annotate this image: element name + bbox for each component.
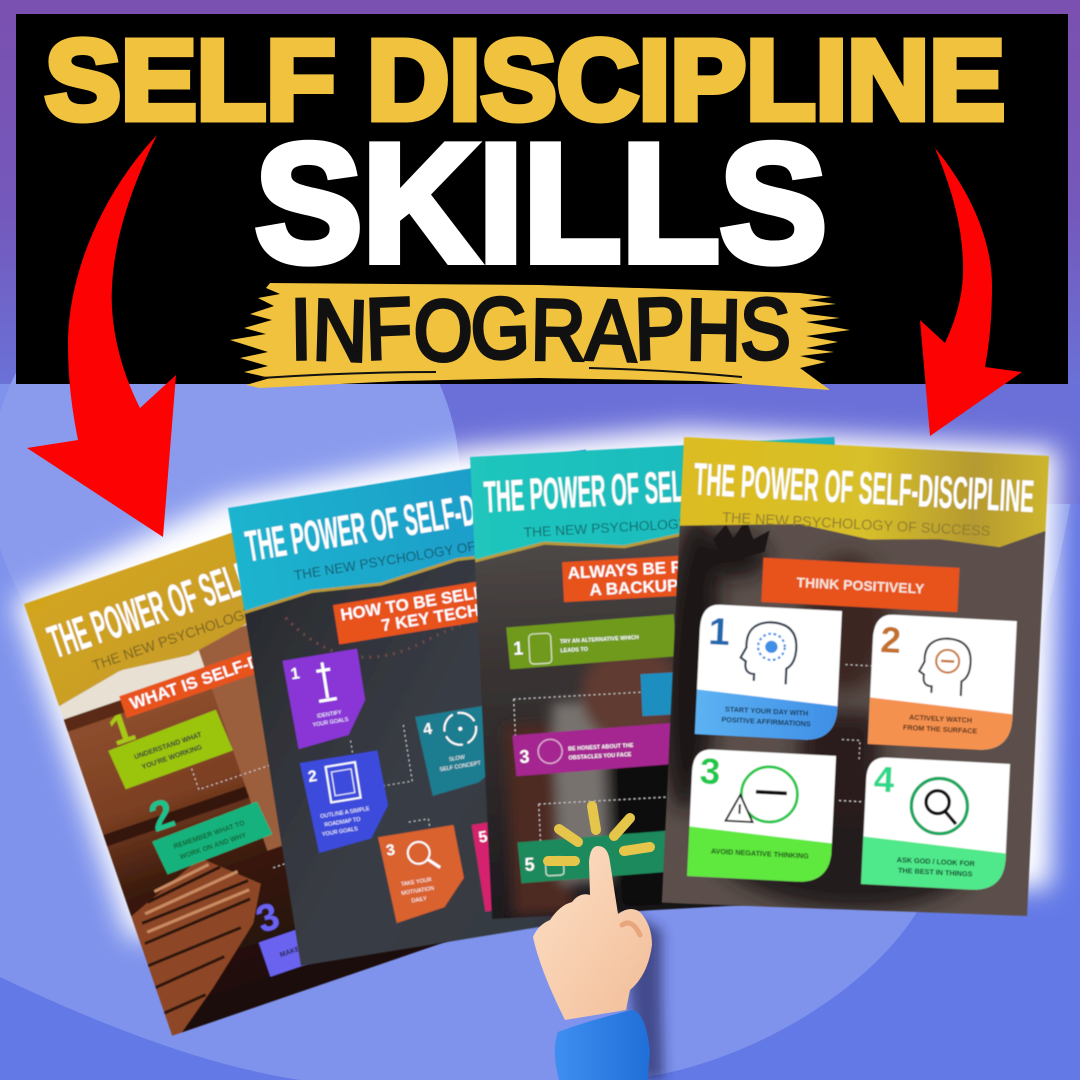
arrow: left red (27, 135, 176, 537)
card 2 (300, 750, 394, 854)
icon: pointing hand (533, 846, 652, 1080)
step 3 (256, 902, 312, 978)
card 2: YOUR GOALS (322, 826, 359, 838)
card 1: POSITIVE AFFIRMATIONS (721, 715, 811, 729)
card 1 icon: head (739, 621, 797, 685)
card 3 caption: AVOID NEGATIVE THINKING (711, 846, 809, 860)
card 4 icon: search (910, 777, 969, 835)
sheet 2: blue (228, 450, 659, 966)
banner text: infographs: INFOGRAPHS (290, 280, 791, 380)
header band (680, 437, 1049, 550)
header band (228, 450, 602, 612)
topic bar: WHAT IS SELF-DISCIPLINE (127, 624, 342, 714)
dashed connectors (349, 724, 431, 827)
step bar 5: 5 (524, 855, 535, 875)
sheet subtitle: THE NEW PSYCHOLOGY OF SUCCESS (293, 526, 545, 583)
sheet 1: gold (23, 484, 450, 1036)
card 2 (868, 614, 1017, 751)
dashed connectors (514, 691, 678, 847)
sleeve cuff (555, 1010, 650, 1080)
card 1: YOUR GOALS (312, 717, 349, 729)
sheet subtitle: THE NEW PSYCHOLOGY OF SUCCESS (523, 510, 782, 540)
step 1: YOU'RE WORKING (141, 744, 204, 772)
card 3 (687, 749, 836, 883)
card 4: THE BEST IN THINGS (898, 866, 973, 878)
card 1: IDENTIFY (317, 710, 342, 720)
card 4: 4 (422, 720, 434, 739)
card 3 icon: warning minus (726, 765, 799, 824)
photo: figure (502, 657, 676, 918)
topic bar: A BACKUP PLAN (589, 573, 729, 600)
header panel (16, 14, 1068, 390)
card 1 (695, 604, 842, 741)
card 4 caption: ASK GOD / LOOK FOR (897, 855, 976, 868)
step bar 3: 3 (519, 747, 530, 767)
card 2: OUTLINE A SIMPLE (320, 806, 370, 820)
topic bar: THINK POSITIVELY (796, 574, 925, 597)
card 4: SELF CONCEPT (439, 761, 482, 774)
step bar 3: BE HONEST ABOUT THE (568, 743, 634, 752)
step bar 1: LEADS TO (560, 647, 589, 655)
step bar 3 (512, 722, 688, 776)
card 3: TAKE YOUR (401, 877, 432, 888)
card 4 (414, 706, 486, 796)
header band (24, 532, 247, 707)
step 2 (149, 799, 273, 876)
topic bar (118, 650, 255, 718)
step 2: REMEMBER WHAT TO (173, 820, 246, 851)
card 1 caption: START YOUR DAY WITH (725, 705, 808, 718)
topic bar (332, 580, 479, 646)
card 4: SLOW (449, 754, 466, 763)
sheet subtitle: THE NEW PSYCHOLOGY OF SUCCESS (722, 510, 991, 540)
card 3 (378, 825, 469, 924)
card 2: ROADMAP TO (324, 817, 361, 829)
icon: tap sparks (548, 806, 650, 861)
step 3: MAKE IT (279, 943, 309, 959)
brush lines (261, 368, 742, 378)
topic bar: ALWAYS BE READY WITH (567, 552, 778, 583)
step bar 3: OBSTACLES YOU FACE (568, 752, 632, 761)
sheet 1: gold: THE POWER OF SELF-DISCIPLINE (42, 512, 369, 668)
step bar 5 (516, 830, 666, 884)
photo: silhouette (666, 524, 972, 912)
title: skills: SKILLS (255, 109, 827, 297)
card 2 number: 2 (880, 619, 902, 661)
topic bar (761, 558, 959, 612)
sheet 2: blue: THE POWER OF SELF-DISCIPLINE (242, 470, 575, 571)
step 1: 1 (103, 703, 140, 755)
step 2: WORK ON AND WHY (179, 832, 248, 861)
card 1: 1 (289, 665, 301, 683)
card 3 number: 3 (699, 750, 721, 792)
dashed connectors (839, 665, 872, 802)
hair spikes (714, 524, 770, 556)
card 3: 3 (385, 842, 397, 860)
photo: sky and beams (58, 623, 282, 852)
title: self discipline: SELF DISCIPLINE (45, 17, 1005, 143)
card 4 (861, 757, 1010, 891)
arrow: right red (920, 148, 1022, 436)
step 2: 2 (143, 789, 180, 841)
topic bar: HOW TO BE SELF DISCIPLINED (339, 565, 595, 625)
card 3: DAILY (411, 896, 428, 904)
card 2: FROM THE SURFACE (903, 723, 978, 735)
header band (470, 437, 839, 561)
step 1: UNDERSTAND WHAT (134, 732, 204, 761)
photo: wooden table (130, 859, 262, 1036)
card 2 icon: head with minus (918, 637, 972, 696)
card 2: 2 (307, 768, 318, 786)
sheet subtitle: THE NEW PSYCHOLOGY OF SUCCESS (90, 572, 347, 675)
card 2 caption: ACTIVELY WATCH (909, 713, 972, 725)
card 5 (470, 822, 492, 912)
dashed connector (190, 764, 286, 870)
card 5: 5 (477, 829, 489, 847)
topic bar: 7 KEY TECHNIQUES (380, 590, 545, 635)
card 3: MOTIVATION (401, 886, 435, 897)
hand shadow (625, 910, 664, 1080)
step 1 (108, 709, 234, 790)
step bar 1: 1 (513, 639, 524, 659)
step bar 1: TRY AN ALTERNATIVE WHICH (560, 635, 639, 646)
card 4 number: 4 (873, 758, 896, 800)
sheet 4: yellow, front (652, 436, 1049, 922)
brush banner (230, 283, 850, 390)
topic bar (561, 554, 679, 603)
white glow behind sheets (24, 437, 1049, 930)
step 3: 3 (251, 895, 285, 942)
step bar 1 (506, 614, 678, 669)
sheet 3: teal (470, 437, 856, 919)
card 1 (283, 649, 371, 749)
card 1 number: 1 (707, 610, 731, 654)
photo: knit texture (284, 616, 462, 660)
step bar 2 (640, 672, 674, 717)
